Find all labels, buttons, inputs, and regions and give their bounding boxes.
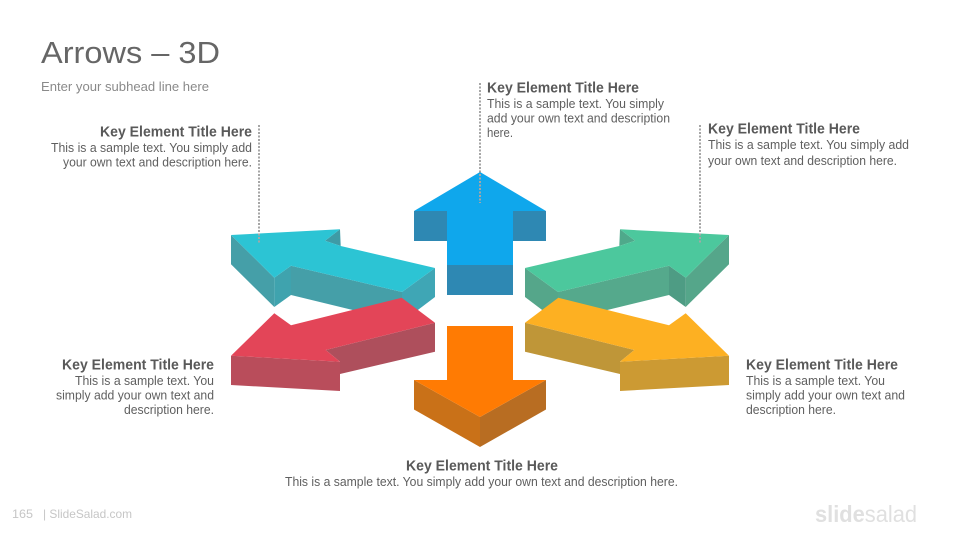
- arrow: teal, pointing upper left: [231, 229, 435, 322]
- text block: lower right: Key Element Title Here: [746, 358, 898, 374]
- text block: top: This is a sample text. You simply: [487, 97, 665, 111]
- text block: lower left: [56, 358, 214, 417]
- text block: lower left: description here.: [124, 403, 214, 417]
- text block: lower left: This is a sample text. You: [75, 374, 214, 388]
- text block: top: [487, 80, 670, 140]
- arrow: yellow, pointing lower right: [525, 298, 729, 391]
- text block: upper right: your own text and description here.: [708, 154, 897, 168]
- text block: top: add your own text and description: [487, 112, 670, 126]
- text block: lower right: This is a sample text. You: [746, 374, 885, 388]
- text block: upper right: Key Element Title Here: [708, 122, 860, 138]
- text block: upper left: your own text and description here.: [63, 156, 252, 170]
- logo: slidesalad wordmark: slidesalad: [815, 501, 917, 527]
- text block: lower right: simply add your own text and: [746, 388, 905, 402]
- text block: top: Key Element Title Here: [487, 80, 639, 96]
- text block: upper left: Key Element Title Here: [100, 124, 252, 140]
- text block: bottom: This is a sample text. You simply add your own text and description here.: [285, 475, 678, 489]
- title: Arrows – 3D: [41, 35, 220, 70]
- footer: page number and site: | SlideSalad.com: [43, 507, 132, 521]
- text block: upper right: [708, 122, 909, 168]
- text block: lower left: simply add your own text and: [56, 388, 214, 402]
- text block: top: here.: [487, 126, 513, 140]
- text block: bottom: Key Element Title Here: [406, 458, 558, 474]
- text block: upper left: This is a sample text. You simply add: [51, 141, 252, 155]
- arrow: orange, pointing down: [414, 326, 546, 447]
- text block: upper left: [51, 124, 252, 170]
- arrow: green, pointing upper right: [525, 229, 729, 322]
- footer: page number and site: 165: [12, 507, 33, 521]
- leader line: upper right: [699, 125, 701, 243]
- text block: lower right: description here.: [746, 403, 836, 417]
- leader line: upper left: [258, 125, 260, 243]
- leader line: top: [479, 83, 481, 203]
- text block: bottom: [285, 458, 678, 489]
- text block: upper right: This is a sample text. You simply add: [708, 138, 909, 152]
- text block: lower left: Key Element Title Here: [62, 358, 214, 374]
- text block: lower right: [746, 358, 905, 417]
- arrow: red, pointing lower left: [231, 298, 435, 391]
- subhead: Enter your subhead line here: [41, 79, 209, 94]
- arrow: blue, pointing up: [414, 172, 546, 295]
